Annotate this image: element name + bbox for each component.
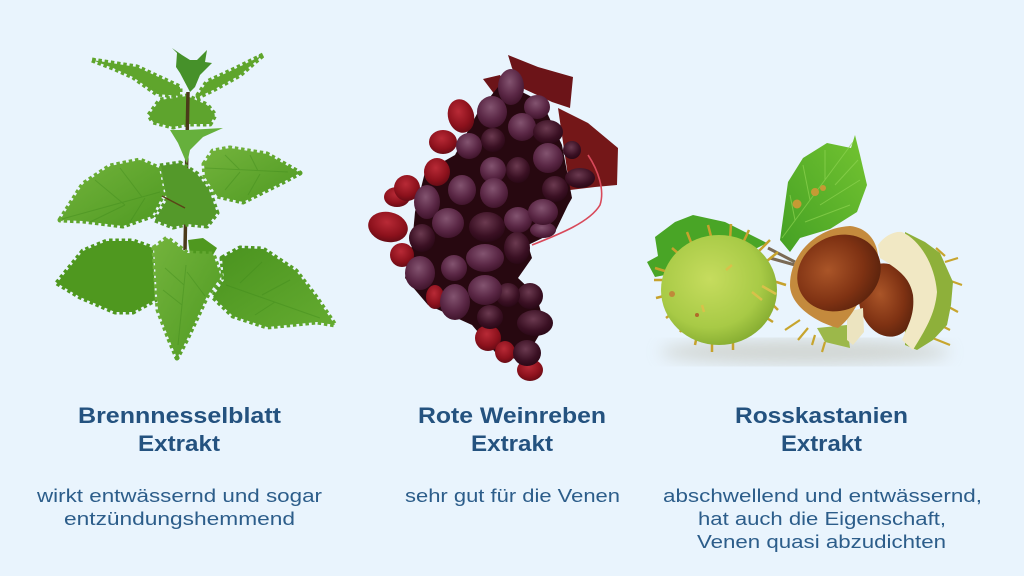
heading: Extrakt [781,431,863,456]
heading: Extrakt [138,431,221,456]
top right leaf [196,55,263,98]
upper middle leaf [149,96,215,127]
back leaf [647,215,767,277]
description [663,485,982,552]
stem [185,92,188,250]
green burr with spikes [654,224,786,352]
image: nettle plant [57,48,335,358]
bottom centre leaf [154,238,221,358]
description: entzündungshemmend [64,508,295,529]
image: red grapes [365,55,618,381]
chestnut 1 [784,220,894,326]
top centre bud [172,48,212,92]
heading: Brennnesselblatt [78,403,282,428]
left shell [790,226,878,328]
ground shadow [660,340,950,364]
small leaf behind [188,238,217,255]
small hanging leaf [170,128,223,164]
right large leaf [204,148,300,202]
top left leaf [92,60,180,96]
twig [768,248,795,265]
flesh crescent [878,232,937,350]
heading: Rosskastanien [735,403,908,428]
description: wirkt entwässernd und sogar [36,485,322,506]
petiole [162,196,185,208]
bottom left leaf [57,241,155,312]
right shell [905,232,953,350]
left large leaf [60,160,164,226]
panel: Rote Weinreben [365,55,620,506]
stem thread [532,155,602,245]
description: abschwellend und entwässernd, [663,485,982,506]
beech leaf [780,135,867,252]
panel: Rosskastanien [647,135,982,552]
vine leaves [483,55,618,190]
shell spikes [785,248,962,352]
dark core [405,82,572,360]
bottom right leaf [213,248,335,327]
image: horse chestnuts [647,135,962,364]
heading [418,403,606,456]
description: hat auch die Eigenschaft, [698,508,946,529]
heading: Extrakt [471,431,554,456]
description: sehr gut für die Venen [405,485,620,506]
lower shell [817,308,864,348]
description [36,485,322,529]
heading [735,403,908,456]
heading: Rote Weinreben [418,403,606,428]
panel: Brennnesselblatt [36,48,335,529]
heading [78,403,282,456]
chestnut 2 [852,258,922,342]
berries [365,69,595,381]
description: Venen quasi abzudichten [697,531,946,552]
central leaves [155,163,217,227]
